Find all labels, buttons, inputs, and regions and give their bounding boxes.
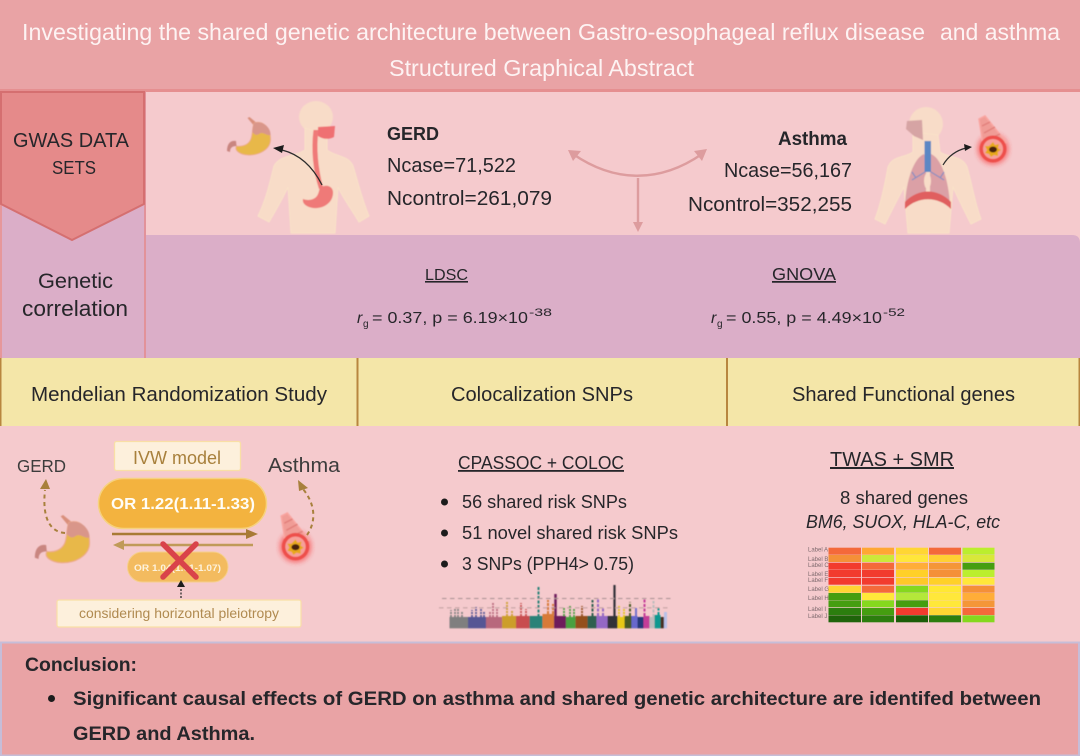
arrow: asthma to GERD — [113, 540, 253, 550]
pleiotropy box: considering horizontal pleiotropy — [79, 605, 279, 621]
text: shared genes count: 8 shared genes — [840, 487, 968, 508]
text block: asthma sample sizes: Asthma — [778, 128, 847, 150]
title banner: and asthma — [940, 19, 1060, 45]
arrows: shared link between traits — [568, 149, 707, 232]
arrow: body to stomach — [273, 145, 322, 185]
GNOVA result: = 0.55, p = 4.49×10 — [726, 310, 882, 327]
panel: Mendelian randomization diagram — [17, 442, 341, 627]
LDSC result: r — [357, 310, 363, 327]
LDSC result — [357, 267, 552, 330]
bullet — [48, 695, 55, 702]
LDSC result: g — [363, 319, 369, 330]
list: shared SNP findings: 51 novel shared risk SNPs — [462, 523, 678, 543]
icon: asthma body with lungs — [875, 107, 981, 233]
panel: genetic correlation results — [146, 235, 1080, 358]
icon: inflamed airway — [977, 116, 1009, 165]
section headers band: Colocalization SNPs — [451, 384, 633, 406]
title banner: Structured Graphical Abstract — [389, 55, 695, 81]
GNOVA result: GNOVA — [772, 264, 836, 284]
main odds ratio pill — [98, 478, 266, 528]
chart: gene heatmap: Label B — [808, 557, 828, 563]
icon: inflamed stomach — [227, 117, 271, 155]
IVW model box: IVW model — [133, 448, 221, 468]
panel: colocalization text — [441, 453, 678, 574]
text block: GERD sample sizes: GERD — [387, 123, 439, 144]
text: conclusion statement — [73, 688, 1041, 745]
panel: genetic correlation left label: correlation — [22, 296, 128, 321]
text: gene names: BM6, SUOX, HLA-C, etc — [806, 512, 1000, 532]
chart: gene heatmap: Label F — [808, 578, 828, 584]
section headers band — [0, 358, 1080, 426]
label: Asthma: Asthma — [268, 454, 341, 477]
title banner — [0, 0, 1080, 92]
arrow: lungs to airway — [943, 144, 972, 165]
arrow: GERD to asthma — [112, 529, 258, 539]
text block: asthma sample sizes: Ncase=56,167 — [724, 160, 852, 182]
list: shared SNP findings: 56 shared risk SNPs — [462, 492, 627, 512]
text block: GERD sample sizes: Ncase=71,522 — [387, 155, 516, 177]
text block: asthma sample sizes: Ncontrol=352,255 — [688, 194, 852, 216]
label: GERD: GERD — [17, 456, 66, 476]
GNOVA result: g — [717, 319, 723, 330]
LDSC result: = 0.37, p = 6.19×10 — [372, 310, 528, 327]
panel: genetic correlation left label — [0, 92, 146, 358]
reverse odds ratio pill — [128, 552, 228, 582]
panel: GWAS data sets label: GWAS DATA — [13, 130, 130, 152]
section headers band: Shared Functional genes — [792, 384, 1015, 406]
heading: TWAS + SMR: TWAS + SMR — [830, 449, 954, 471]
chart: gene heatmap: Label A — [808, 548, 828, 554]
arrow: airway to asthma dashed — [298, 480, 313, 535]
panel: genetic correlation left label: Genetic — [38, 269, 113, 293]
panel: conclusion — [1, 642, 1079, 756]
text: conclusion statement: Significant causal effects of GERD on asthma and shared genetic architecture are identifed between — [73, 688, 1041, 710]
LDSC result: LDSC — [425, 267, 468, 284]
list: shared SNP findings: 3 SNPs (PPH4> 0.75) — [462, 554, 634, 574]
icon: airway small — [279, 513, 312, 563]
panel: GWAS data sets label: SETS — [52, 157, 96, 178]
chart: gene heatmap: Label J — [808, 614, 827, 620]
title banner: Investigating the shared genetic architecture between Gastro-esophageal reflux disease — [22, 19, 925, 45]
chart: gene heatmap: Label E — [808, 572, 828, 578]
panel: GWAS data sets label — [1, 92, 144, 240]
chart: Manhattan plot — [439, 585, 671, 628]
panel: shared genes text — [806, 449, 1000, 532]
arrow: stomach to GERD dashed — [40, 479, 65, 533]
chart: gene heatmap: Label C — [808, 563, 829, 569]
main odds ratio pill: OR 1.22(1.11-1.33) — [111, 496, 255, 513]
IVW model box — [114, 442, 240, 470]
icon: stomach small — [35, 515, 90, 563]
section headers band: Mendelian Randomization Study — [31, 384, 327, 406]
icon: GERD body with digestive tract — [258, 101, 369, 233]
GNOVA result: r — [711, 310, 717, 327]
text block: GERD sample sizes: Ncontrol=261,079 — [387, 188, 552, 210]
arrow: pleiotropy dotted — [177, 580, 185, 598]
icon: red cross — [163, 544, 196, 577]
LDSC result: -38 — [529, 307, 552, 319]
GNOVA result — [711, 264, 905, 330]
heading: conclusion: Conclusion: — [25, 655, 137, 676]
chart: gene heatmap: Label G — [808, 587, 829, 593]
pleiotropy box — [57, 600, 301, 627]
text block: GERD sample sizes — [387, 123, 552, 210]
chart: gene heatmap — [808, 548, 994, 622]
text: conclusion statement: GERD and Asthma. — [73, 723, 255, 745]
text block: asthma sample sizes — [688, 128, 852, 216]
heading: CPASSOC + COLOC: CPASSOC + COLOC — [458, 453, 624, 473]
reverse odds ratio pill: OR 1.04(1.01-1.07) — [134, 563, 221, 574]
chart: gene heatmap: Label H — [808, 596, 829, 602]
list: shared SNP findings — [441, 492, 678, 574]
GNOVA result: -52 — [883, 307, 905, 319]
chart: gene heatmap: Label I — [808, 607, 826, 613]
